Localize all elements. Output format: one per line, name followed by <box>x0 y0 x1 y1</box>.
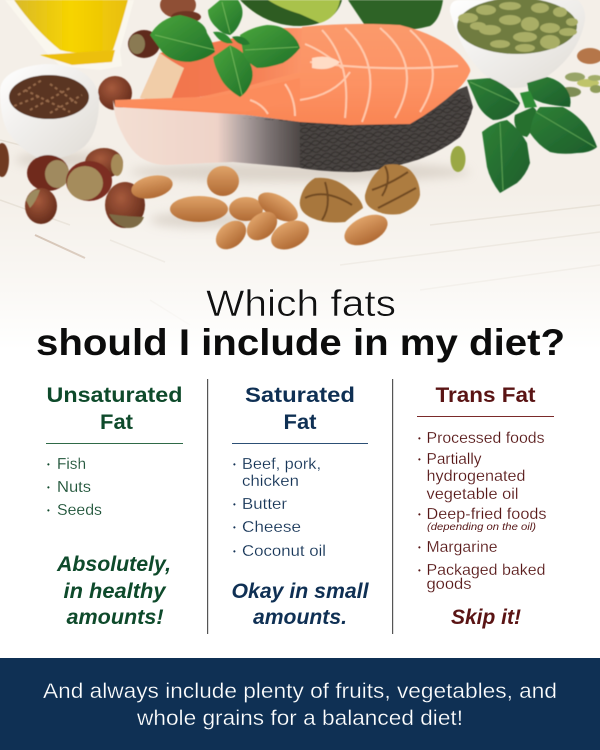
list: saturated foods: Beef, pork, <box>242 456 321 473</box>
heading: Unsaturated Fat: Fat <box>100 410 133 434</box>
verdict: okay in small amounts <box>232 579 370 629</box>
heading: Unsaturated Fat <box>46 383 182 434</box>
icon: right seeds and almond <box>559 48 600 97</box>
list: trans fat foods: Margarine <box>426 539 498 556</box>
rule <box>417 416 554 417</box>
footer text <box>43 680 557 730</box>
panel: unsaturated fat <box>46 383 183 629</box>
list: unsaturated foods: • <box>47 460 50 469</box>
list: trans fat foods: • <box>418 455 421 464</box>
icon: flax seed bowl <box>0 64 99 159</box>
list: unsaturated foods <box>47 456 102 519</box>
list: trans fat foods: hydrogenated <box>426 468 526 485</box>
list: trans fat foods: Partially <box>426 451 482 468</box>
list: saturated foods: Coconut oil <box>242 543 326 560</box>
list: trans fat foods: • <box>418 543 421 552</box>
list: saturated foods: • <box>233 460 236 469</box>
background: white wooden table <box>0 0 600 350</box>
list: saturated foods: • <box>233 500 236 509</box>
heading: Saturated Fat: Saturated <box>245 383 355 407</box>
list: trans fat foods <box>418 430 546 593</box>
list: trans fat foods: Packaged baked <box>426 562 546 579</box>
icon: walnuts <box>300 164 420 222</box>
icon: pistachio <box>450 146 466 172</box>
list: saturated foods: Cheese <box>242 519 301 536</box>
icon: front hazelnuts <box>0 143 145 228</box>
list: trans fat foods: vegetable oil <box>426 486 518 503</box>
list: saturated foods <box>233 456 326 560</box>
list: trans fat foods: Deep-fried foods <box>426 506 546 523</box>
verdict: skip it: Skip it! <box>451 605 521 629</box>
icon: pumpkin seed bowl <box>450 0 585 88</box>
verdict: absolutely: in healthy <box>64 579 167 603</box>
heading: Unsaturated Fat: Unsaturated <box>46 383 182 407</box>
list: trans fat foods: Processed foods <box>426 430 544 447</box>
rule <box>232 443 368 444</box>
belly and skin <box>113 100 302 168</box>
verdict: absolutely <box>56 552 171 629</box>
list: trans fat foods: • <box>418 510 421 519</box>
verdict: absolutely: Absolutely, <box>56 552 171 576</box>
food photo illustration <box>0 0 600 255</box>
icon: avocado <box>240 0 443 31</box>
heading: Saturated Fat <box>245 383 355 434</box>
column dividers <box>207 379 393 634</box>
heading: Saturated Fat: Fat <box>284 410 316 434</box>
list: trans fat foods: (depending on the oil) <box>427 521 536 533</box>
verdict: okay in small amounts: amounts. <box>253 605 347 629</box>
icon: almonds <box>129 166 392 255</box>
flesh <box>115 24 470 125</box>
flesh lines <box>250 28 458 122</box>
list: unsaturated foods: Seeds <box>57 502 102 519</box>
list: unsaturated foods: • <box>47 506 50 515</box>
verdict: okay in small amounts: Okay in small <box>232 579 370 603</box>
list: saturated foods: Butter <box>242 496 288 513</box>
list: unsaturated foods: Nuts <box>57 479 91 496</box>
list: trans fat foods: • <box>418 434 421 443</box>
icon: front salmon steak <box>113 24 473 172</box>
panel: saturated fat <box>232 383 370 629</box>
list: unsaturated foods: • <box>47 483 50 492</box>
icon: top basil <box>150 0 300 97</box>
soft shadows <box>15 152 470 228</box>
footer banner <box>0 658 600 750</box>
list: trans fat foods: • <box>418 566 421 575</box>
title: should I include in my diet? <box>36 322 565 363</box>
footer text: whole grains for a balanced diet! <box>136 707 463 730</box>
list: saturated foods: • <box>233 547 236 556</box>
icon: right basil <box>467 77 597 193</box>
list: unsaturated foods: Fish <box>57 456 86 473</box>
icon: oil gravy boat <box>5 0 134 70</box>
list: saturated foods: • <box>233 523 236 532</box>
list: trans fat foods: goods <box>426 576 472 593</box>
footer text: And always include plenty of fruits, vegetables, and <box>43 680 557 703</box>
panel: trans fat <box>417 383 554 629</box>
rule <box>46 443 183 444</box>
title <box>36 283 565 363</box>
verdict: absolutely: amounts! <box>66 605 164 629</box>
list: saturated foods: chicken <box>242 473 299 490</box>
title: Which fats <box>206 283 396 324</box>
heading: Trans Fat: Trans Fat <box>436 383 536 407</box>
icon: back salmon steak <box>140 28 302 102</box>
icon: hazelnuts back <box>98 0 201 110</box>
